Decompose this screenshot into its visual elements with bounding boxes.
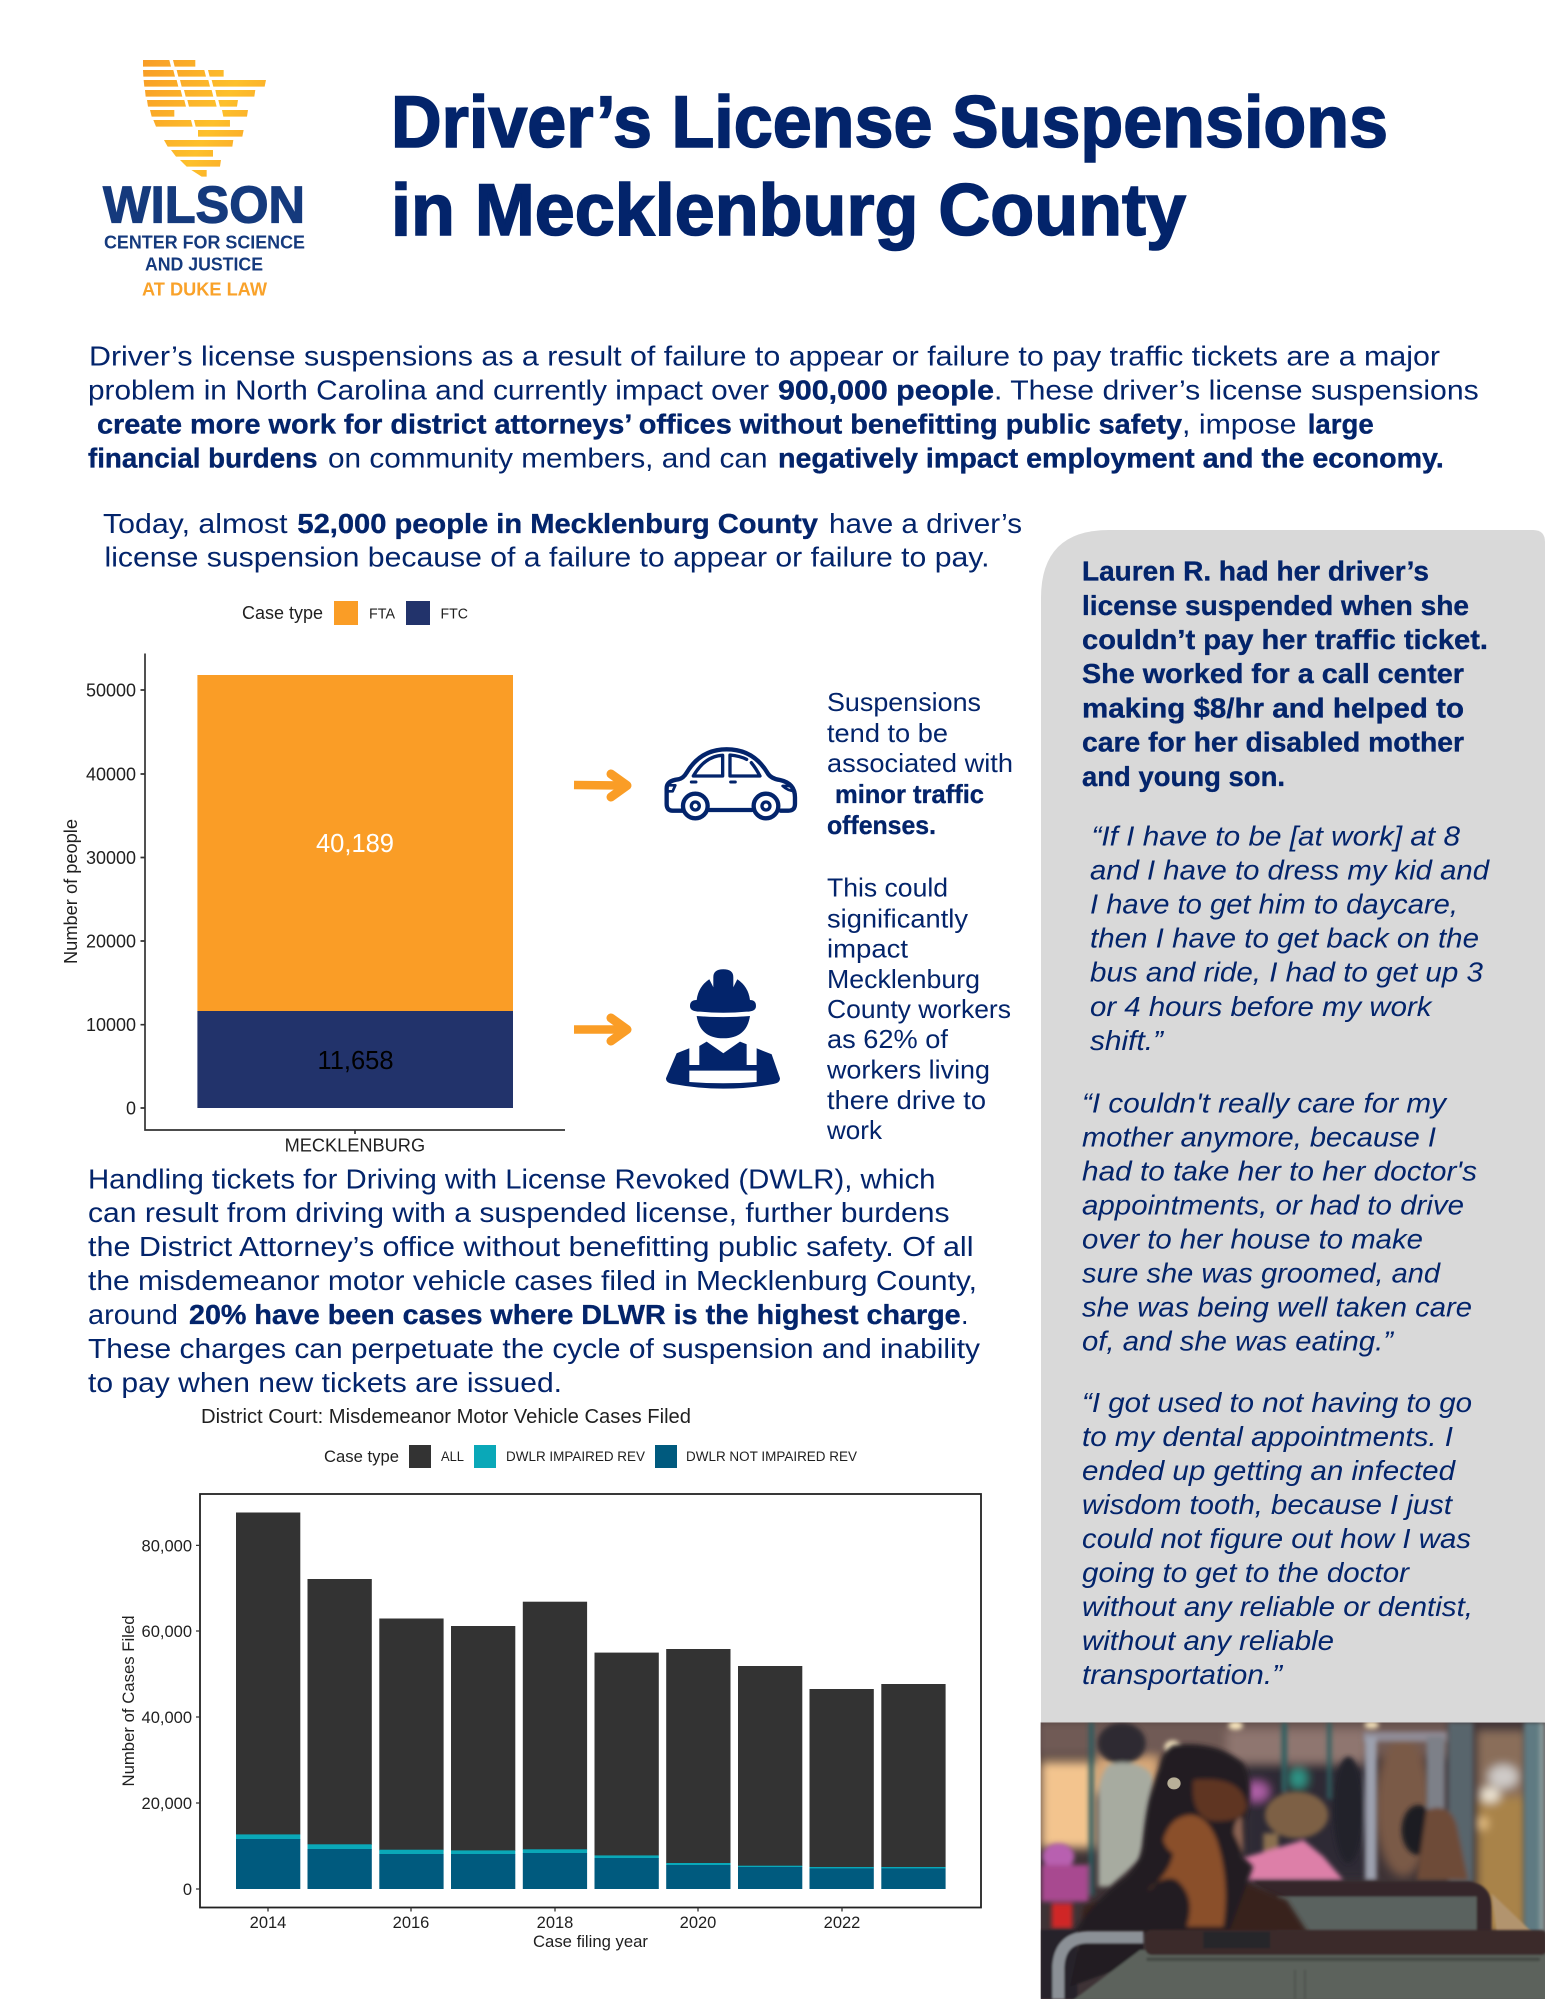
- y axis: Number of people: [61, 819, 81, 964]
- intro paragraph: [88, 341, 1479, 474]
- quote 2: [1082, 1088, 1477, 1357]
- story summary: license suspended when she: [1082, 590, 1469, 621]
- story summary: [1082, 556, 1488, 792]
- quote 1: I have to get him to daycare,: [1090, 888, 1458, 920]
- text: minor traffic offenses: tend to be: [827, 718, 948, 748]
- intro paragraph: . These driver’s license suspensions: [994, 375, 1479, 406]
- plot frame and axes: 2016: [393, 1914, 429, 1932]
- text: impact on workers: County workers: [827, 994, 1011, 1024]
- text: impact on workers: This could: [827, 872, 948, 902]
- chart legend: [242, 601, 468, 625]
- story summary: and young son.: [1082, 761, 1285, 792]
- DWLR paragraph: can result from driving with a suspended license, further burdens: [88, 1197, 950, 1228]
- plot frame and axes: 2018: [537, 1914, 573, 1932]
- story summary: couldn’t pay her traffic ticket.: [1082, 624, 1488, 655]
- y axis: 50000: [86, 680, 136, 700]
- quote 1: bus and ride, I had to get up 3: [1090, 956, 1484, 988]
- y axis: [61, 654, 565, 1134]
- quote 1: shift.”: [1090, 1025, 1165, 1056]
- plot frame and axes: 2022: [824, 1914, 860, 1932]
- intro paragraph: create more work for district attorneys’ offices without benefitting public safety: [97, 409, 1183, 440]
- intro paragraph: problem in North Carolina and currently impact over: [88, 375, 769, 406]
- quote 2: “I couldn't really care for my: [1082, 1088, 1448, 1119]
- plot frame and axes: Number of Cases Filed: [120, 1616, 138, 1786]
- bar segment: FTA 40,189: [197, 675, 513, 1011]
- quote 2: had to take her to her doctor's: [1082, 1156, 1477, 1187]
- logo: Wilson Center for Science and Justice: [103, 60, 305, 300]
- DWLR paragraph: [88, 1164, 980, 1398]
- text: minor traffic offenses: minor traffic: [835, 779, 984, 809]
- quote 2: mother anymore, because I: [1082, 1122, 1436, 1153]
- chart legend: [324, 1445, 857, 1468]
- bars: all cases: [236, 1512, 946, 1868]
- plot frame and axes: 80,000: [142, 1538, 192, 1556]
- intro paragraph: Driver’s license suspensions as a result of failure to appear or failure to pay traffic tickets are a major: [89, 341, 1440, 372]
- bar chart: misdemeanor motor vehicle cases filed: [120, 1406, 981, 1951]
- y axis: 30000: [86, 848, 136, 868]
- text: impact on workers: significantly: [827, 904, 968, 934]
- quote 2: appointments, or had to drive: [1082, 1190, 1464, 1221]
- DWLR paragraph: around: [88, 1299, 178, 1330]
- plot frame and axes: 2014: [250, 1914, 286, 1932]
- text: 52,000 people statement: [103, 508, 1022, 572]
- y axis: 40000: [86, 764, 136, 784]
- text: minor traffic offenses: Suspensions: [827, 687, 981, 717]
- quote 2: sure she was groomed, and: [1082, 1258, 1442, 1289]
- chart title: District Court: Misdemeanor Motor Vehicle Cases Filed: [201, 1406, 691, 1428]
- icon: car: [667, 749, 795, 818]
- logo line: at Duke Law: AT DUKE LAW: [142, 280, 267, 300]
- chart legend: DWLR NOT IMPAIRED REV: [686, 1449, 857, 1464]
- intro paragraph: large: [1308, 409, 1374, 440]
- quote 3: transportation.”: [1082, 1659, 1284, 1690]
- bar segment: FTA 40,189: 40,189: [316, 830, 394, 858]
- quote 3: [1082, 1387, 1473, 1690]
- plot frame and axes: 0: [183, 1881, 192, 1899]
- text: impact on workers: impact: [827, 934, 909, 964]
- y axis: 20000: [86, 932, 136, 952]
- bar chart: suspensions by case type: [61, 601, 565, 1156]
- plot frame and axes: [120, 1494, 981, 1951]
- icon: construction worker: [666, 969, 780, 1089]
- chart legend: Case type: [324, 1447, 399, 1466]
- quote 2: over to her house to make: [1082, 1224, 1423, 1255]
- bar segment: FTC 11,658: 11,658: [317, 1047, 394, 1075]
- chart legend: ALL: [441, 1449, 464, 1464]
- bars: DWLR impaired revocation: [236, 1834, 946, 1869]
- quote 1: and I have to dress my kid and: [1090, 854, 1491, 886]
- text: impact on workers: Mecklenburg: [827, 964, 980, 994]
- photo: front seat and rail: [1041, 1930, 1545, 2000]
- intro paragraph: , impose: [1182, 409, 1296, 440]
- intro paragraph: on community members, and can: [328, 443, 768, 474]
- text: minor traffic offenses: associated with: [827, 748, 1013, 778]
- quote 2: she was being well taken care: [1082, 1292, 1472, 1323]
- DWLR paragraph: to pay when new tickets are issued.: [88, 1367, 562, 1398]
- quote 1: then I have to get back on the: [1090, 922, 1479, 954]
- text: 52,000 people statement: have a driver’s: [829, 508, 1022, 539]
- logo line: and justice: AND JUSTICE: [145, 254, 263, 274]
- quote 1: [1090, 820, 1491, 1056]
- quote 1: or 4 hours before my work: [1090, 991, 1433, 1022]
- quote 3: without any reliable or dentist,: [1082, 1591, 1473, 1622]
- DWLR paragraph: the misdemeanor motor vehicle cases filed in Mecklenburg County,: [88, 1265, 977, 1296]
- chart legend: FTA: [369, 606, 395, 622]
- photo: woman with long hair: [1073, 1744, 1308, 1933]
- text: 52,000 people statement: license suspension because of a failure to appear or failure to pay.: [104, 542, 990, 572]
- text: impact on workers: work: [826, 1115, 883, 1145]
- quote 3: going to get to the doctor: [1082, 1557, 1411, 1588]
- DWLR paragraph: Handling tickets for Driving with License Revoked (DWLR), which: [88, 1164, 935, 1194]
- title: in Mecklenburg County: [391, 170, 1186, 251]
- logo wordmark: WILSON: [103, 176, 305, 234]
- plot frame and axes: 60,000: [142, 1623, 192, 1641]
- intro paragraph: financial burdens: [88, 443, 318, 474]
- DWLR paragraph: 20% have been cases where DLWR is the highest charge: [189, 1299, 961, 1330]
- chart legend: DWLR IMPAIRED REV: [506, 1449, 645, 1464]
- chart legend: FTC: [440, 606, 468, 622]
- intro paragraph: 900,000 people: [778, 375, 994, 406]
- panel: Lauren R. story: [1041, 530, 1545, 1722]
- text: impact on workers: workers living: [826, 1054, 990, 1084]
- intro paragraph: negatively impact employment and the economy.: [778, 443, 1444, 474]
- quote 3: wisdom tooth, because I just: [1082, 1489, 1453, 1520]
- text: 52,000 people statement: 52,000 people in Mecklenburg County: [297, 508, 819, 539]
- text: impact on workers: there drive to: [827, 1085, 986, 1115]
- quote 3: ended up getting an infected: [1082, 1455, 1457, 1486]
- title: [391, 82, 1388, 251]
- bar segment: FTC 11,658: [197, 1011, 513, 1108]
- chart legend: Case type: [242, 602, 323, 623]
- quote 3: to my dental appointments. I: [1082, 1421, 1453, 1452]
- arrow to worker: [574, 1018, 627, 1041]
- story summary: care for her disabled mother: [1082, 726, 1464, 758]
- panel background: [1041, 530, 1545, 1722]
- plot frame and axes: Case filing year: [533, 1933, 648, 1951]
- quote 3: “I got used to not having to go: [1082, 1387, 1472, 1418]
- text: minor traffic offenses: offenses.: [827, 810, 936, 840]
- plot frame and axes: 20,000: [142, 1795, 192, 1813]
- bars: DWLR not impaired revocation: [236, 1839, 946, 1889]
- arrow to car: [574, 774, 627, 797]
- text: impact on workers: [826, 872, 1011, 1145]
- DWLR paragraph: the District Attorney’s office without benefitting public safety. Of all: [88, 1231, 973, 1262]
- quote 2: of, and she was eating.”: [1082, 1326, 1395, 1357]
- title: Driver’s License Suspensions: [391, 82, 1388, 163]
- text: minor traffic offenses: [827, 687, 1013, 840]
- logo line: center for science: CENTER FOR SCIENCE: [104, 232, 305, 252]
- story summary: She worked for a call center: [1082, 658, 1464, 689]
- logo mark: stacked orange bars: [143, 60, 266, 177]
- story summary: making $8/hr and helped to: [1082, 692, 1464, 724]
- story summary: Lauren R. had her driver’s: [1082, 556, 1429, 587]
- y axis: 10000: [86, 1015, 136, 1035]
- DWLR paragraph: These charges can perpetuate the cycle of suspension and inability: [88, 1333, 980, 1364]
- DWLR paragraph: .: [961, 1299, 968, 1330]
- x axis label: MECKLENBURG: [285, 1136, 425, 1156]
- quote 3: without any reliable: [1082, 1625, 1334, 1656]
- text: impact on workers: as 62% of: [827, 1024, 949, 1054]
- quote 3: could not figure out how I was: [1082, 1523, 1471, 1554]
- y axis: 0: [126, 1098, 136, 1118]
- text: 52,000 people statement: Today, almost: [103, 508, 288, 539]
- quote 1: “If I have to be [at work] at 8: [1092, 820, 1461, 852]
- photo: woman riding a bus: [1037, 1720, 1545, 2000]
- plot frame and axes: 2020: [680, 1914, 716, 1932]
- plot frame and axes: 40,000: [142, 1709, 192, 1727]
- photo: hair clip: [1167, 1777, 1181, 1789]
- photo: rear seat: [1254, 1882, 1533, 1935]
